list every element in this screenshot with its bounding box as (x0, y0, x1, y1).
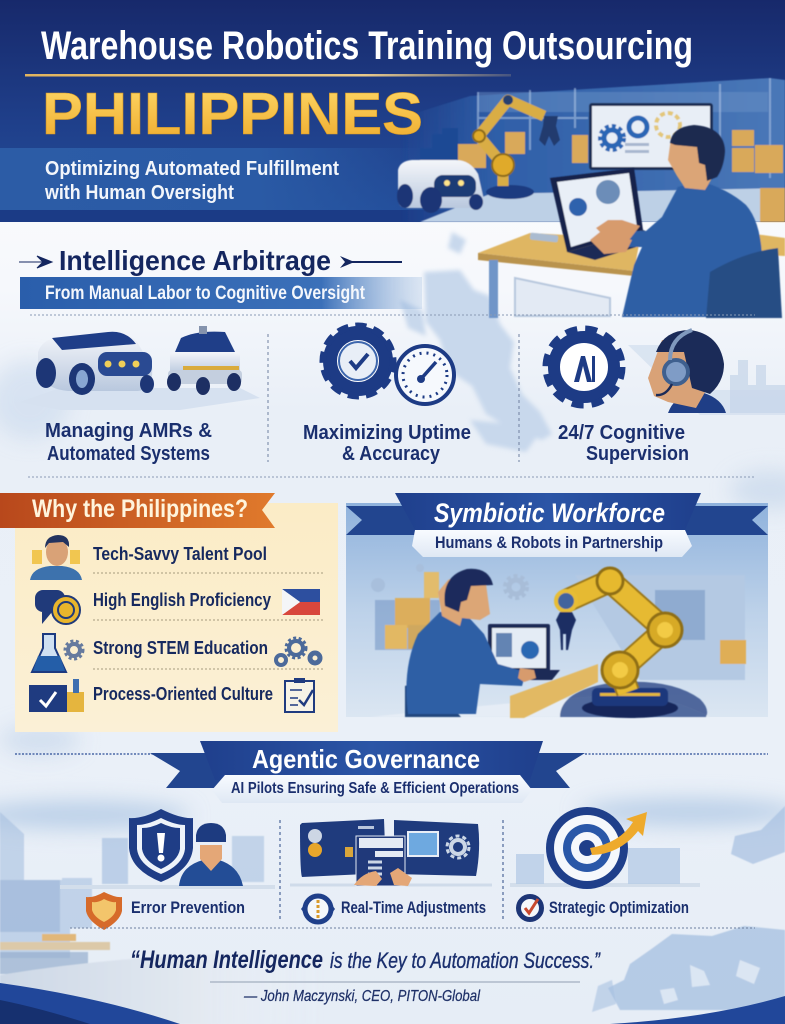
icon: sync arrows (301, 896, 335, 922)
card: AMRs (20, 326, 260, 465)
caption: Maximizing Uptime (303, 421, 471, 444)
heading ribbon: Why the Philippines? (32, 495, 248, 523)
card: strategic optimization: Strategic Optimization (549, 898, 689, 917)
soft blue washes (0, 360, 785, 829)
icon: control screens (300, 819, 479, 886)
header banner (0, 0, 785, 222)
caption: & Accuracy (342, 442, 441, 465)
sub-band (20, 277, 422, 309)
icon: guard (179, 823, 243, 886)
robot arm small (473, 95, 560, 199)
delivery robot (397, 160, 484, 213)
monitor (589, 103, 713, 170)
icon: gears (276, 638, 320, 665)
stacks of blue crates (420, 128, 458, 168)
item: process culture (29, 678, 314, 712)
section heading: Intelligence Arbitrage (19, 245, 422, 309)
chair (706, 248, 782, 318)
caption: 24/7 Cognitive (558, 421, 685, 444)
right arrow (340, 256, 402, 268)
caption: Supervision (586, 442, 689, 465)
head (438, 576, 490, 626)
icon: gear with AI (546, 329, 622, 405)
icon: large AMR (36, 332, 154, 395)
card: real-time adjustments: Real-Time Adjustments (341, 898, 486, 917)
left arrow (19, 256, 52, 268)
robot arm (556, 568, 682, 718)
icon: target (546, 807, 647, 889)
card: supervision (546, 329, 785, 465)
subtitle: Optimizing Automated Fulfillment (45, 157, 339, 180)
item: process culture: Process-Oriented Culture (93, 683, 273, 704)
agentic governance heading (15, 741, 768, 803)
dotted rule top (30, 314, 755, 316)
person body (620, 181, 764, 317)
body (406, 610, 526, 714)
caption: Automated Systems (47, 442, 210, 465)
subtitle (44, 157, 339, 204)
icon: flag (282, 589, 320, 615)
icon: shield (129, 809, 193, 882)
heading ribbon (0, 493, 275, 528)
country name: PHILIPPINES (42, 81, 423, 147)
floor (420, 188, 785, 222)
ribbon heading: Symbiotic Workforce (434, 498, 665, 528)
icon: orange shield badge (86, 892, 122, 930)
faint Philippines map background (400, 232, 552, 452)
panel: symbiotic workforce (346, 493, 768, 718)
card: strategic optimization (510, 807, 700, 920)
item: English proficiency: High English Proficiency (93, 589, 272, 610)
card: error prevention: Error Prevention (131, 898, 245, 917)
quote: “Human Intelligence (130, 946, 323, 974)
caption (303, 421, 471, 465)
card: error prevention (60, 809, 275, 930)
ribbon heading: Humans & Robots in Partnership (435, 534, 663, 552)
card: real-time adjustments (290, 819, 492, 922)
header warehouse scene (397, 78, 785, 222)
skyline background left (0, 812, 330, 1024)
quote (130, 946, 601, 974)
icon: clipboard (285, 678, 314, 712)
quote: is the Key to Automation Success.” (330, 948, 601, 973)
icon: check badge (518, 896, 542, 920)
icon: gear with check (323, 326, 393, 396)
floor plan (20, 388, 260, 410)
item: STEM education (32, 634, 320, 672)
icon: small AMR (167, 326, 242, 395)
bottom corner swooshes (0, 983, 785, 1024)
head (668, 130, 715, 190)
caption: Managing AMRs & (45, 419, 212, 442)
caption (558, 421, 689, 465)
cardboard boxes (458, 130, 785, 222)
item: English proficiency (35, 589, 320, 624)
subtitle band (0, 148, 430, 210)
agentic governance heading: Agentic Governance (252, 744, 480, 774)
quote attribution: — John Maczynski, CEO, PITON-Global (243, 988, 480, 1005)
item: STEM education: Strong STEM Education (93, 637, 268, 658)
operator and laptop (405, 569, 598, 718)
desk (510, 664, 598, 718)
icon: agent with headset (648, 330, 726, 413)
caption (45, 419, 212, 465)
section heading: Intelligence Arbitrage: From Manual Labor to Cognitive Oversight (45, 283, 366, 304)
background warehouse blocks (370, 564, 746, 717)
item: talent pool (30, 535, 267, 580)
desk (478, 233, 640, 271)
subtitle: with Human Oversight (44, 181, 234, 204)
laptop (550, 168, 643, 252)
monitor (488, 624, 550, 672)
map background right (592, 806, 785, 1012)
skyline decoration (628, 345, 785, 415)
icon: gauge (396, 346, 454, 404)
ribbon heading (346, 493, 768, 557)
section heading: Intelligence Arbitrage: Intelligence Arbitrage (59, 245, 331, 276)
chair (405, 683, 461, 717)
panel: why the Philippines (0, 493, 338, 732)
card: uptime (303, 326, 471, 465)
operator at desk illustration (478, 125, 785, 318)
gold rule (25, 74, 511, 76)
agentic governance heading: AI Pilots Ensuring Safe & Efficient Operations (231, 780, 519, 797)
item: talent pool: Tech-Savvy Talent Pool (93, 543, 267, 564)
